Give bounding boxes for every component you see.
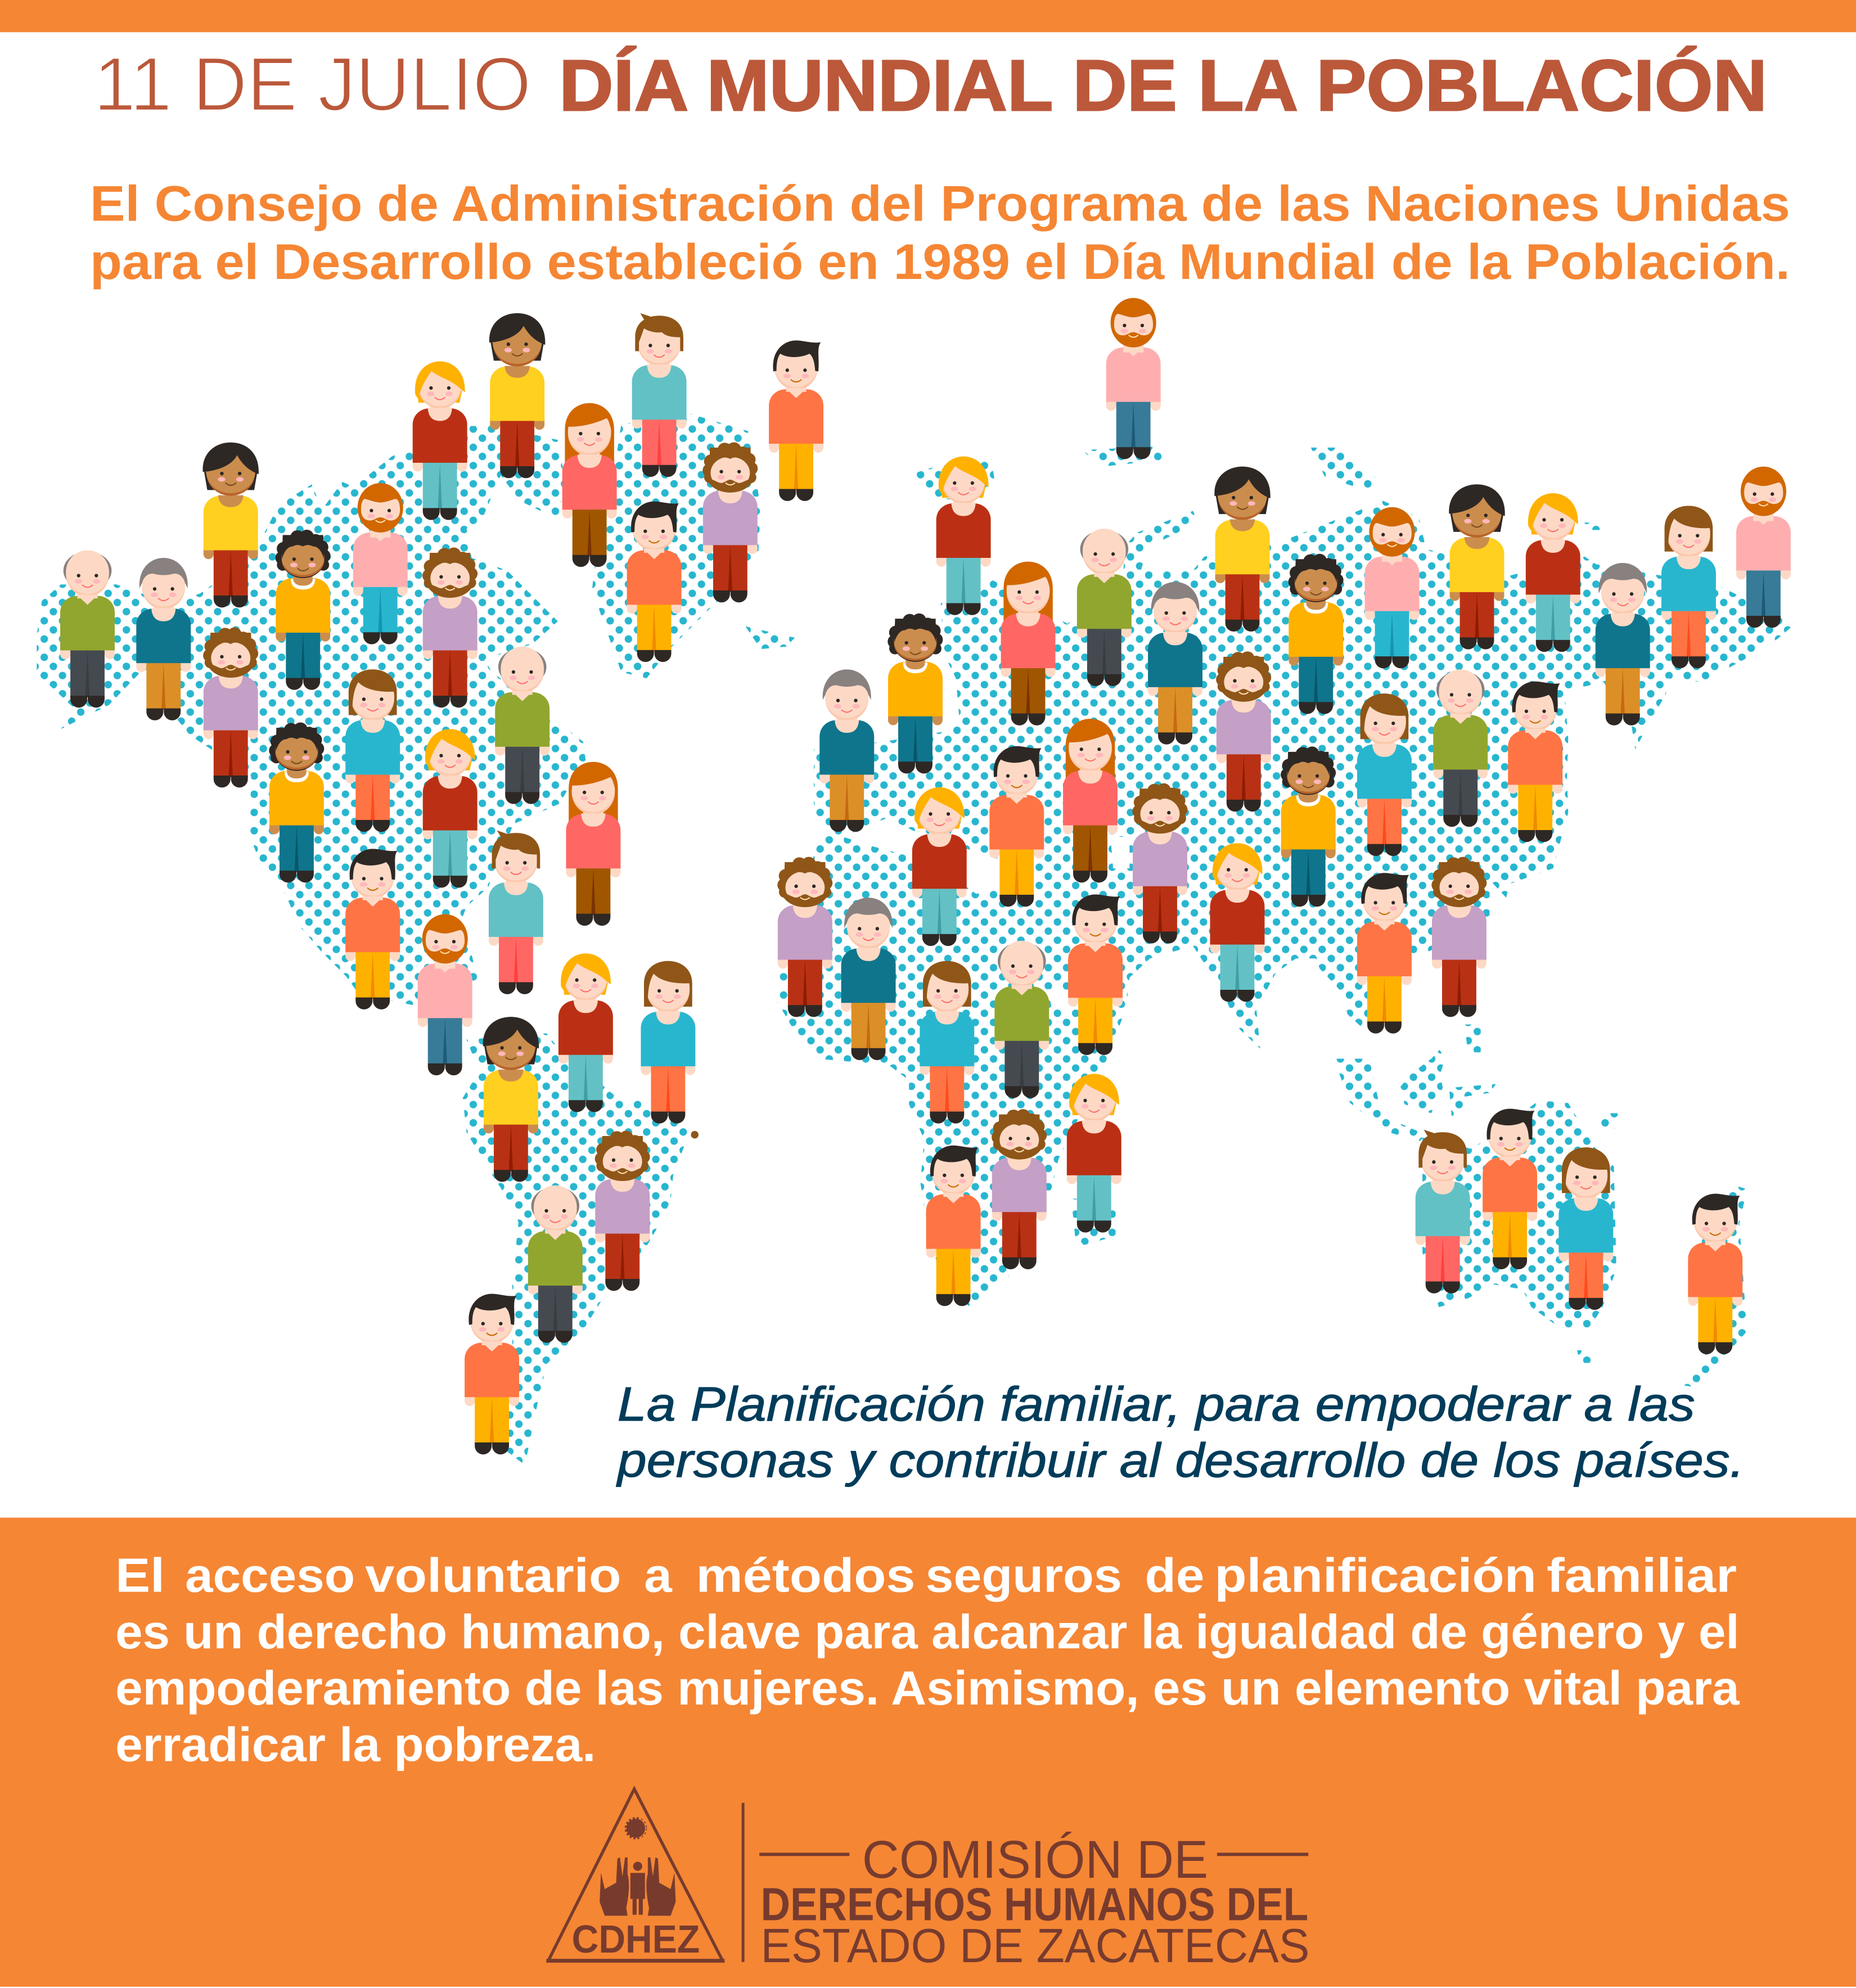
body text: es un derecho humano, clave para alcanzar la igualdad de género y el bbox=[115, 1605, 1740, 1659]
body text: acceso bbox=[185, 1548, 355, 1602]
person bbox=[528, 1185, 583, 1343]
person bbox=[1558, 1147, 1613, 1310]
person bbox=[1688, 1194, 1742, 1354]
person bbox=[269, 723, 324, 882]
person bbox=[926, 1146, 981, 1306]
person bbox=[841, 898, 896, 1060]
person bbox=[1736, 467, 1791, 628]
organisation name bbox=[759, 1830, 1309, 1973]
person bbox=[912, 787, 967, 946]
person bbox=[566, 762, 620, 926]
person bbox=[1365, 507, 1419, 668]
person bbox=[423, 729, 477, 887]
panel: bottom orange bbox=[0, 1518, 1856, 1987]
person bbox=[1449, 484, 1505, 650]
top orange bar bbox=[0, 0, 1856, 32]
person bbox=[1289, 554, 1344, 714]
organisation name: DERECHOS HUMANOS DEL bbox=[760, 1878, 1308, 1930]
person bbox=[1077, 529, 1132, 686]
body text bbox=[115, 1548, 1740, 1771]
person bbox=[1067, 1074, 1121, 1233]
person bbox=[1596, 563, 1650, 725]
person bbox=[60, 550, 115, 707]
person bbox=[1508, 682, 1562, 842]
person bbox=[495, 647, 549, 804]
person bbox=[1416, 1130, 1470, 1293]
person bbox=[413, 362, 467, 520]
person bbox=[1526, 493, 1580, 652]
person bbox=[702, 442, 758, 602]
title: 11 DE JULIO bbox=[94, 42, 531, 127]
icon: hands and person bbox=[600, 1858, 675, 1915]
person bbox=[1661, 506, 1716, 668]
subtitle text block: El Consejo de Administración del Programa de las Naciones Unidas bbox=[90, 175, 1790, 231]
body text: métodos bbox=[696, 1548, 915, 1602]
person bbox=[558, 953, 613, 1112]
organisation name: COMISIÓN DE bbox=[862, 1830, 1208, 1890]
person bbox=[1063, 719, 1118, 882]
person bbox=[989, 746, 1044, 907]
divider line bbox=[742, 1803, 745, 1962]
person bbox=[1357, 873, 1412, 1034]
person bbox=[562, 403, 617, 567]
person bbox=[203, 443, 259, 607]
person bbox=[1106, 298, 1161, 459]
body text: planificación bbox=[1214, 1548, 1537, 1602]
person bbox=[994, 941, 1049, 1098]
person bbox=[888, 614, 943, 774]
body text: voluntario bbox=[365, 1548, 621, 1602]
person bbox=[136, 558, 191, 720]
person bbox=[1483, 1109, 1537, 1269]
person bbox=[992, 1109, 1047, 1269]
title: DÍA MUNDIAL DE LA POBLACIÓN bbox=[559, 46, 1767, 126]
person bbox=[920, 961, 974, 1124]
subtitle text block bbox=[90, 175, 1790, 290]
person bbox=[769, 340, 823, 501]
person bbox=[1148, 582, 1202, 745]
person bbox=[1431, 857, 1486, 1017]
person bbox=[345, 669, 400, 832]
person bbox=[627, 502, 682, 662]
logo label: CDHEZ bbox=[572, 1917, 700, 1961]
person bbox=[1281, 746, 1336, 907]
person bbox=[819, 669, 874, 832]
person bbox=[1357, 693, 1412, 856]
title bbox=[94, 42, 1767, 127]
person bbox=[1210, 843, 1264, 1002]
person bbox=[418, 914, 472, 1075]
person bbox=[483, 1017, 539, 1182]
icon: sun bbox=[627, 1819, 646, 1838]
body text: El bbox=[115, 1548, 165, 1602]
person bbox=[595, 1131, 650, 1291]
logo: CDHEZ triangle bbox=[547, 1789, 724, 1963]
person bbox=[489, 313, 545, 478]
person bbox=[465, 1294, 519, 1454]
body text: familiar bbox=[1547, 1548, 1737, 1602]
body text: seguros bbox=[925, 1548, 1122, 1602]
person bbox=[1433, 669, 1488, 827]
body text: a bbox=[644, 1548, 673, 1602]
person bbox=[641, 961, 695, 1124]
person bbox=[1214, 467, 1271, 632]
person bbox=[203, 628, 258, 787]
body text: de bbox=[1145, 1548, 1204, 1602]
person bbox=[632, 313, 687, 477]
person bbox=[345, 849, 400, 1009]
small brown dot bbox=[691, 1131, 699, 1139]
body text: erradicar la pobreza. bbox=[115, 1717, 596, 1771]
person bbox=[777, 857, 832, 1017]
organisation name: ESTADO DE ZACATECAS bbox=[760, 1919, 1309, 1973]
person bbox=[489, 831, 543, 994]
person bbox=[1216, 651, 1271, 812]
person bbox=[1068, 895, 1123, 1055]
italic tagline: La Planificación familiar, para empoderar a las bbox=[618, 1377, 1695, 1431]
halftone dotted world map bbox=[37, 412, 1795, 1463]
italic tagline: personas y contribuir al desarrollo de los países. bbox=[615, 1433, 1745, 1487]
person bbox=[353, 483, 408, 644]
body text: empoderamiento de las mujeres. Asimismo, es un elemento vital para bbox=[115, 1661, 1740, 1715]
italic tagline bbox=[615, 1377, 1745, 1487]
person bbox=[276, 530, 331, 690]
person bbox=[1001, 562, 1056, 725]
world map of people bbox=[37, 298, 1795, 1463]
person bbox=[422, 547, 477, 707]
subtitle text block: para el Desarrollo estableció en 1989 el Día Mundial de la Población. bbox=[90, 233, 1790, 290]
person bbox=[1132, 783, 1187, 944]
person bbox=[936, 457, 991, 615]
